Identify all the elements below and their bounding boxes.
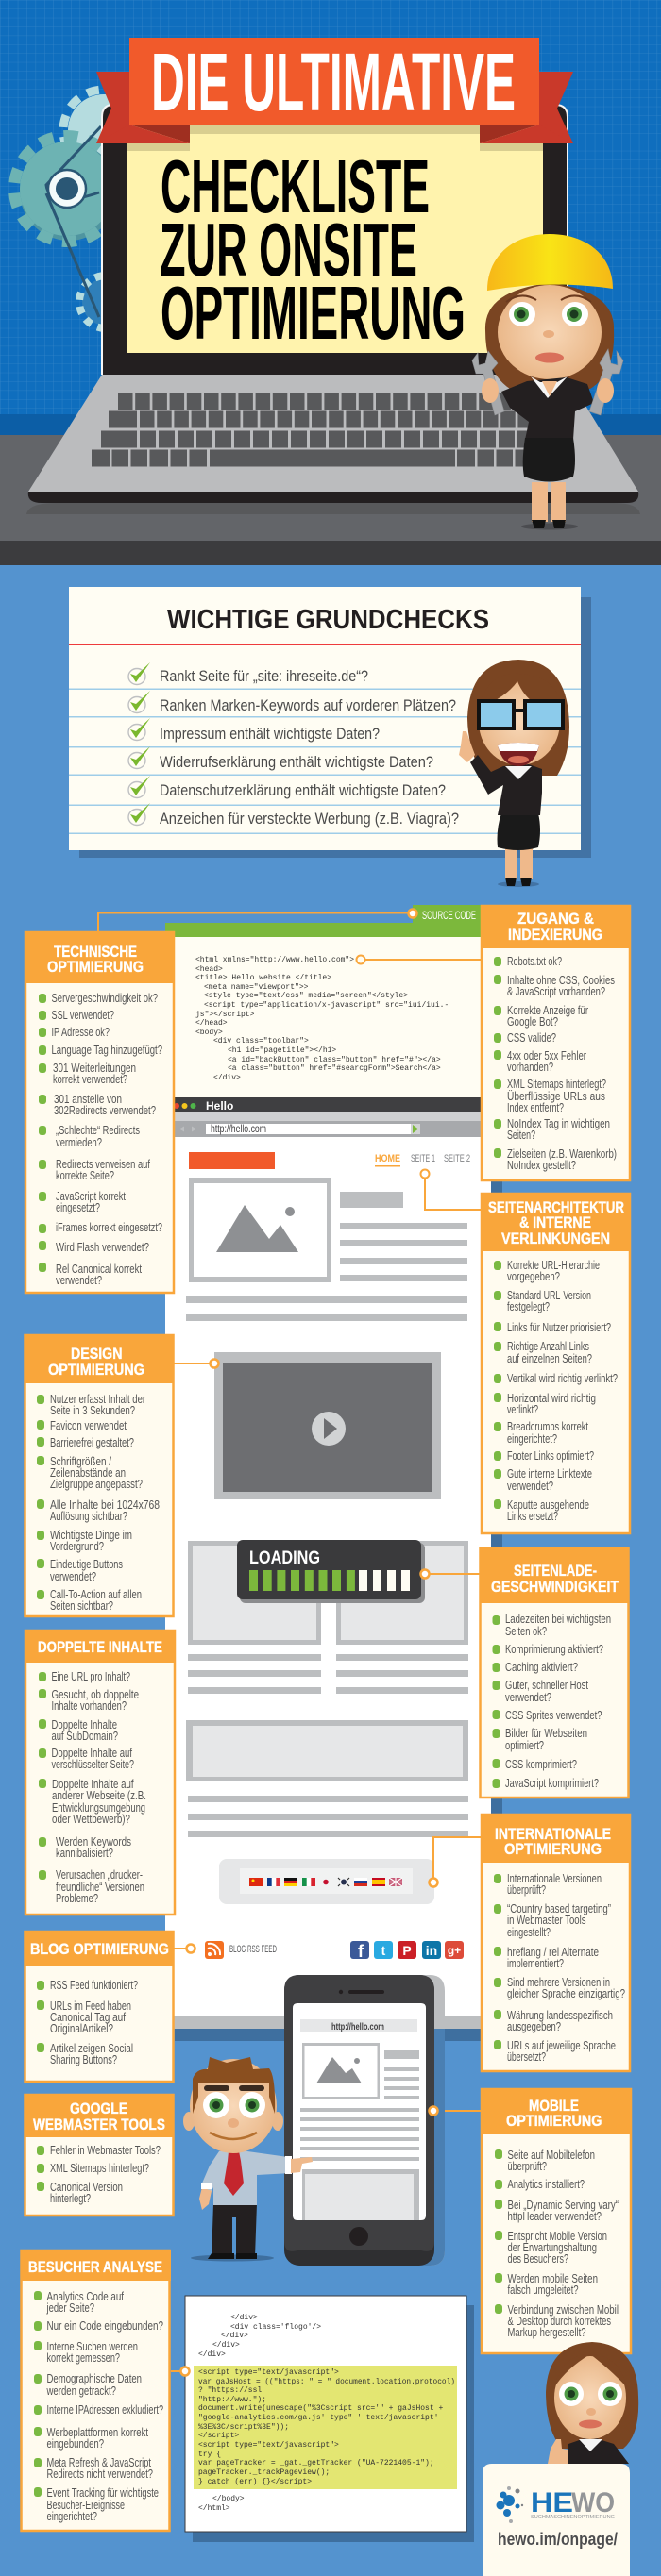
checklist: Meta Refresh & JavaScript bbox=[47, 2456, 151, 2469]
checklist: Artikel zeigen Social bbox=[50, 2042, 133, 2055]
tag: source code: SOURCE CODE bbox=[422, 909, 476, 922]
wide image placeholder bbox=[186, 1720, 468, 1837]
checklist: Zielseiten (z.B. Warenkorb) bbox=[507, 1147, 617, 1161]
checklist: Verursachen „drucker- bbox=[56, 1868, 143, 1882]
checklist: Guter, schneller Host bbox=[505, 1679, 588, 1692]
heading: INDEXIERUNG bbox=[508, 926, 602, 944]
checklist: OriginalArtikel? bbox=[50, 2022, 113, 2035]
checklist: Doppelte Inhalte auf bbox=[51, 1747, 132, 1760]
checklist: eingerichtet? bbox=[47, 2510, 97, 2523]
checklist: verwendet? bbox=[50, 1570, 96, 1583]
content placeholders bbox=[186, 1192, 467, 1321]
source code block: <html xmlns="http://www.hello.com"> bbox=[195, 956, 354, 964]
checklist bbox=[39, 1670, 146, 1905]
checklist: Kaputte ausgehende bbox=[507, 1498, 589, 1512]
source code block: <body> bbox=[195, 1029, 223, 1037]
checklist: Rel Canonical korrekt bbox=[56, 1263, 142, 1276]
image placeholders with text lines bbox=[188, 1541, 468, 1694]
checklist: eingerichtet? bbox=[507, 1432, 557, 1446]
checklist bbox=[128, 662, 459, 828]
logo tagline: SUCHMASCHINENOPTIMIERUNG bbox=[531, 2515, 615, 2520]
checklist: vorhanden? bbox=[507, 1061, 553, 1074]
heading: DESIGN bbox=[71, 1345, 123, 1363]
highlighted tracking code bbox=[194, 2366, 457, 2489]
source code block: </head> bbox=[195, 1019, 228, 1028]
checklist: werden getrackt? bbox=[46, 2384, 116, 2398]
code sample panel: <script type="text/javascript"> bbox=[198, 2368, 339, 2377]
checklist: Gesucht, ob doppelte bbox=[51, 1688, 139, 1701]
checklist: auf SubDomain? bbox=[51, 1730, 118, 1743]
heading bbox=[495, 1825, 611, 1858]
checklist: korrekte Seite? bbox=[56, 1169, 114, 1182]
checklist: Anzeichen für versteckte Werbung (z.B. Viagra)? bbox=[160, 810, 459, 828]
code sample panel: <script type="text/javascript"> bbox=[198, 2441, 339, 2450]
heading: BLOG OPTIMIERUNG bbox=[30, 1940, 169, 1958]
checklist: Gute interne Linktexte bbox=[507, 1467, 592, 1480]
icons: social media: in bbox=[426, 1943, 437, 1958]
image placeholder bbox=[189, 1178, 330, 1282]
source code block: <div class="toolbar"> bbox=[213, 1037, 309, 1045]
checklist: hinterlegt? bbox=[50, 2192, 91, 2205]
checklist: httpHeader verwendet? bbox=[508, 2210, 602, 2223]
code sample panel: <div class='flogo'/> bbox=[230, 2323, 321, 2332]
checklist: Rankt Seite für „site: ihreseite.de“? bbox=[160, 667, 368, 685]
checklist: Call-To-Action auf allen bbox=[50, 1588, 142, 1601]
laptop bbox=[26, 104, 640, 514]
code sample panel: var pageTracker = _gat._getTracker ("UA-7221405-1"); bbox=[198, 2459, 434, 2467]
checklist: auf einzelnen Seiten? bbox=[507, 1352, 592, 1365]
checklist bbox=[37, 1979, 138, 2066]
heading: OPTIMIERUNG bbox=[47, 958, 144, 976]
checklist: verschlüsselter Seite? bbox=[51, 1758, 134, 1771]
icons: social media bbox=[350, 1941, 464, 1961]
checklist: jeder Seite? bbox=[46, 2301, 94, 2315]
source code block: <a class="button" href="#searcgForm">Search</a> bbox=[228, 1064, 441, 1073]
heading: BESUCHER ANALYSE bbox=[28, 2258, 162, 2276]
panel: seitenladegeschwindigkeit bbox=[480, 1547, 629, 1798]
panel: hewo logo and link bbox=[483, 2464, 630, 2576]
site logo block bbox=[189, 1152, 275, 1169]
checklist: verwendet? bbox=[505, 1691, 551, 1704]
heading: SEITENARCHITEKTUR bbox=[488, 1198, 624, 1216]
heading bbox=[47, 943, 144, 976]
tag: source code bbox=[413, 905, 481, 923]
checklist: Event Tracking für wichtigste bbox=[47, 2486, 159, 2500]
code sample panel: var gaJsHost = (("https: " = " document.location.protocol) bbox=[198, 2378, 455, 2386]
checklist: korrekt gemessen? bbox=[47, 2351, 120, 2365]
checklist: Ranken Marken-Keywords auf vorderen Plätzen? bbox=[160, 696, 456, 714]
heading: wichtige grundchecks: WICHTIGE GRUNDCHECKS bbox=[167, 605, 489, 635]
icons: social media: g+ bbox=[448, 1944, 461, 1957]
checklist: JavaScript komprimiert? bbox=[505, 1777, 599, 1790]
checklist: Korrekte Anzeige für bbox=[507, 1004, 588, 1017]
video player bbox=[214, 1352, 441, 1499]
checklist: Eine URL pro Inhalt? bbox=[51, 1670, 130, 1683]
checklist: Google Bot? bbox=[507, 1015, 558, 1029]
checklist: Bilder für Webseiten bbox=[505, 1727, 587, 1740]
checklist: Barrierefrei gestaltet? bbox=[50, 1436, 134, 1449]
panel: wichtige grundchecks bbox=[69, 587, 591, 887]
heading bbox=[491, 1562, 619, 1596]
checklist: Schriftgrößen / bbox=[50, 1455, 111, 1468]
checklist: korrekt verwendet? bbox=[53, 1073, 127, 1086]
source code block: <title> Hello website </title> bbox=[195, 974, 331, 982]
checklist: festgelegt? bbox=[507, 1300, 550, 1313]
checklist: Entspricht Mobile Version bbox=[508, 2230, 607, 2243]
heading bbox=[508, 910, 602, 944]
code sample panel: document.write(unescape("%3Cscript src='" + gaJsHost + bbox=[198, 2404, 443, 2413]
browser chrome: http://hello.com bbox=[211, 1122, 266, 1135]
checklist: Canonical Tag auf bbox=[50, 2011, 126, 2024]
navigation: HOME bbox=[375, 1153, 400, 1164]
checklist: Index entfernt? bbox=[507, 1101, 564, 1114]
connectors bbox=[98, 910, 481, 2371]
heading: MOBILE bbox=[529, 2097, 579, 2115]
checklist: Horizontal wird richtig bbox=[507, 1392, 596, 1405]
browser chrome: Hello bbox=[206, 1099, 233, 1112]
source code block: <script type="application/x-javascript" src="iui/iui.- bbox=[204, 1001, 449, 1010]
checklist: Komprimierung aktiviert? bbox=[505, 1643, 603, 1656]
code sample panel: </div> bbox=[230, 2314, 258, 2322]
checklist: Korrekte URL-Hierarchie bbox=[507, 1259, 600, 1272]
link: hewo.im/onpage: hewo.im/onpage/ bbox=[498, 2530, 618, 2549]
checklist: Favicon verwendet bbox=[50, 1419, 127, 1432]
checklist: Zeilenabstände an bbox=[50, 1466, 126, 1480]
checklist: NoIndex Tag in wichtigen bbox=[507, 1117, 610, 1130]
code sample panel bbox=[185, 2296, 474, 2542]
heading: INTERNATIONALE bbox=[495, 1825, 611, 1843]
icon: molecule logo bbox=[497, 2486, 523, 2523]
checklist bbox=[34, 2290, 163, 2523]
panel: technische optimierung bbox=[25, 931, 175, 1293]
checklist: XML Sitemaps hinterlegt? bbox=[50, 2162, 149, 2175]
checklist: ausgegeben? bbox=[507, 2020, 561, 2033]
checklist: Widerrufserklärung enthält wichtigste Daten? bbox=[160, 753, 433, 771]
checklist: eingesetzt? bbox=[56, 1201, 100, 1214]
code sample panel: </body> bbox=[212, 2495, 245, 2503]
checklist: des Besuchers? bbox=[508, 2252, 568, 2266]
checklist: falsch umgeleitet? bbox=[508, 2283, 579, 2297]
navigation: SEITE 1 bbox=[411, 1153, 435, 1164]
heading bbox=[33, 2099, 165, 2133]
source code block bbox=[165, 905, 491, 1097]
checklist bbox=[494, 1872, 625, 2064]
checklist: Redirects verweisen auf bbox=[56, 1158, 150, 1171]
checklist: verwendet? bbox=[507, 1480, 553, 1493]
checklist: Interne Suchen werden bbox=[47, 2340, 138, 2353]
checklist: anderer Webseite (z.B. bbox=[52, 1789, 146, 1802]
heading bbox=[506, 2097, 602, 2130]
title line: checkliste: CHECKLISTE bbox=[161, 144, 430, 228]
checklist: Canonical Version bbox=[50, 2181, 123, 2194]
checklist: JavaScript korrekt bbox=[56, 1190, 126, 1203]
code sample panel: try { bbox=[198, 2451, 221, 2459]
checklist: iFrames korrekt eingesetzt? bbox=[56, 1221, 162, 1234]
checklist: CSS Sprites verwendet? bbox=[505, 1709, 602, 1722]
checklist: Wichtigste Dinge im bbox=[50, 1529, 132, 1542]
checklist: überprüft? bbox=[507, 1883, 546, 1897]
checklist: vermieden? bbox=[56, 1136, 102, 1149]
source code block: </div> bbox=[213, 1074, 241, 1082]
checklist: Links für Nutzer priorisiert? bbox=[507, 1321, 611, 1334]
checklist bbox=[37, 2144, 161, 2205]
checklist: Robots.txt ok? bbox=[507, 955, 562, 968]
checklist: Ladezeiten bei wichtigsten bbox=[505, 1613, 611, 1626]
connector endpoint on tracking code bbox=[181, 2367, 189, 2376]
panel: blog optimierung bbox=[25, 1931, 174, 2082]
character: woman giving thumbs up bbox=[546, 2342, 638, 2464]
navigation: SEITE 2 bbox=[444, 1153, 470, 1164]
checklist: Analytics installiert? bbox=[508, 2178, 585, 2191]
checklist: NoIndex gestellt? bbox=[507, 1159, 576, 1172]
checklist: Language Tag hinzugefügt? bbox=[51, 1044, 162, 1057]
checklist bbox=[39, 992, 162, 1287]
checklist: & JavaScript vorhanden? bbox=[507, 985, 605, 998]
checklist: URLs im Feed haben bbox=[50, 1999, 131, 2013]
checklist: Links ersetzt? bbox=[507, 1510, 558, 1523]
checklist: Demographische Daten bbox=[47, 2372, 142, 2385]
header scene bbox=[0, 0, 661, 565]
heading: TECHNISCHE bbox=[54, 943, 137, 961]
checklist: Doppelte Inhalte bbox=[51, 1718, 117, 1731]
checklist: gleicher Sprache einzigartig? bbox=[507, 1987, 625, 2000]
checklist: Inhalte vorhanden? bbox=[51, 1699, 127, 1713]
checklist: Nutzer erfasst Inhalt der bbox=[50, 1393, 145, 1406]
checklist: Vertikal wird richtig verlinkt? bbox=[507, 1372, 618, 1385]
checklist bbox=[494, 1259, 618, 1523]
checklist: XML Sitemaps hinterlegt? bbox=[507, 1078, 606, 1091]
phone: http://hello.com bbox=[331, 2021, 384, 2032]
checklist: übersetzt? bbox=[507, 2050, 546, 2064]
heading bbox=[48, 1345, 144, 1379]
code sample panel: pageTracker._trackPageview(); bbox=[198, 2468, 330, 2477]
logo wordmark: hewo bbox=[531, 2487, 615, 2518]
checklist: Richtige Anzahl Links bbox=[507, 1340, 589, 1353]
icon: wrenches bbox=[472, 349, 623, 415]
character: man pointing bbox=[183, 2057, 313, 2261]
code sample panel: ? "https://ssl bbox=[198, 2386, 262, 2395]
checklist: Währung landesspezifisch bbox=[507, 2009, 613, 2022]
checklist: 301 anstelle von bbox=[54, 1093, 122, 1106]
checklist: oder Wettbewerb)? bbox=[52, 1813, 130, 1826]
code sample panel: %3E%3C/script%3E")); bbox=[198, 2423, 289, 2432]
checklist: Datenschutzerklärung enthält wichtigste Daten? bbox=[160, 781, 446, 799]
code sample panel: </div> bbox=[198, 2350, 226, 2359]
loading bar: LOADING bbox=[249, 1548, 320, 1568]
checklist: Internationale Versionen bbox=[507, 1872, 602, 1885]
checklist: 302Redirects verwendet? bbox=[54, 1104, 156, 1117]
checklist bbox=[493, 1613, 611, 1790]
character: woman with glasses bbox=[459, 660, 569, 887]
checklist: RSS Feed funktioniert? bbox=[50, 1979, 138, 1992]
heading: VERLINKUNGEN bbox=[501, 1229, 610, 1247]
language flags bbox=[219, 1859, 434, 1904]
checklist: Markup hergestellt? bbox=[508, 2326, 586, 2339]
code sample panel: </html> bbox=[198, 2504, 230, 2513]
heading: OPTIMIERUNG bbox=[504, 1840, 602, 1858]
heading: GESCHWINDIGKEIT bbox=[491, 1578, 619, 1596]
logo wordmark: hewo: HE bbox=[531, 2487, 573, 2518]
checklist: Fehler in Webmaster Tools? bbox=[50, 2144, 161, 2157]
checklist: Vordergrund? bbox=[50, 1540, 104, 1553]
checklist: verwendet? bbox=[56, 1274, 102, 1287]
checklist: kannibalisiert? bbox=[56, 1847, 113, 1860]
checklist: Standard URL-Version bbox=[507, 1289, 591, 1302]
code sample panel: </div> bbox=[221, 2332, 248, 2340]
source code block: js"></script> bbox=[195, 1011, 255, 1019]
checklist: Besucher-Ereignisse bbox=[47, 2499, 125, 2512]
checklist: Sharing Buttons? bbox=[50, 2053, 117, 2066]
source code block: <a id="backButton" class="button" href="#"></a> bbox=[228, 1056, 441, 1064]
browser chrome bbox=[165, 1097, 491, 1137]
checklist: Redirects nicht verwendet? bbox=[47, 2467, 153, 2481]
panel: website mockup bbox=[165, 905, 502, 2041]
checklist: Wird Flash verwendet? bbox=[56, 1241, 149, 1254]
blue grid backdrop bbox=[0, 0, 661, 435]
keyboard bbox=[92, 402, 538, 459]
checklist: Auflösung sichtbar? bbox=[50, 1510, 127, 1523]
checklist: & Desktop durch korrektes bbox=[508, 2315, 611, 2328]
checklist: Seite in 3 Sekunden? bbox=[50, 1404, 135, 1417]
checklist: „Schlechte“ Redirects bbox=[56, 1124, 140, 1137]
heading: GOOGLE bbox=[70, 2099, 127, 2117]
checklist: Überflüssige URLs aus bbox=[507, 1090, 605, 1103]
source code block: <meta name="viewport">> bbox=[204, 983, 309, 992]
desk bbox=[0, 435, 661, 565]
checklist: eingebunden? bbox=[47, 2437, 104, 2451]
checklist: freundliche“ Versionen bbox=[56, 1881, 144, 1894]
icon: gears and belt bbox=[14, 90, 144, 328]
panel: besucher analyse bbox=[21, 2250, 171, 2531]
checklist: optimiert? bbox=[505, 1739, 544, 1752]
checklist bbox=[37, 1393, 160, 1613]
navigation bbox=[375, 1153, 470, 1166]
panel: design optimierung bbox=[25, 1334, 174, 1616]
code sample panel: </script> bbox=[198, 2432, 239, 2440]
heading: SEITENLADE- bbox=[514, 1562, 597, 1580]
source code block: <style type="text/css" media="screen"</style> bbox=[204, 992, 408, 1000]
checklist: CSS komprimiert? bbox=[505, 1758, 577, 1771]
checklist: Seiten ok? bbox=[505, 1625, 547, 1638]
checklist bbox=[495, 2149, 619, 2339]
checklist: vorgegeben? bbox=[507, 1270, 560, 1283]
checklist: Alle Inhalte bei 1024x768 bbox=[50, 1498, 160, 1512]
checklist: Zielgruppe angepasst? bbox=[50, 1478, 143, 1491]
heading: & INTERNE bbox=[519, 1213, 591, 1231]
checklist: Seiten? bbox=[507, 1129, 535, 1142]
checklist: Footer Links optimiert? bbox=[507, 1449, 594, 1463]
checklist: Caching aktiviert? bbox=[505, 1661, 578, 1674]
checklist: CSS valide? bbox=[507, 1031, 556, 1045]
loading bar bbox=[237, 1540, 425, 1603]
panel: seitenarchitektur und interne verlinkungen bbox=[481, 1193, 631, 1533]
title line: zur onsite: ZUR ONSITE bbox=[160, 208, 417, 292]
title bbox=[151, 37, 516, 355]
checklist: Sind mehrere Versionen in bbox=[507, 1976, 610, 1989]
checklist: Entwicklungsumgebung bbox=[52, 1801, 145, 1815]
heading: ZUGANG & bbox=[517, 910, 594, 928]
checklist: Doppelte Inhalte auf bbox=[52, 1778, 134, 1791]
phone bbox=[284, 1975, 445, 2266]
checklist: überprüft? bbox=[508, 2160, 547, 2173]
checklist: Breadcrumbs korrekt bbox=[507, 1420, 588, 1433]
checklist: Werden Keywords bbox=[56, 1835, 131, 1848]
ribbon bbox=[96, 38, 573, 143]
code sample panel: } catch (err) {}</script> bbox=[198, 2478, 312, 2486]
checklist: Interne IPAdressen exkludiert? bbox=[47, 2403, 163, 2417]
checklist: Werden mobile Seiten bbox=[508, 2272, 598, 2285]
code sample panel: "google-analytics.com/ga.js' type" ' text/javascript' bbox=[198, 2414, 438, 2422]
code sample panel: "http://www."); bbox=[198, 2396, 266, 2404]
checklist: Seiten sichtbar? bbox=[50, 1599, 113, 1613]
panel: doppelte inhalte bbox=[25, 1630, 176, 1915]
checklist: eingestellt? bbox=[507, 1926, 551, 1939]
checklist: Servergeschwindigkeit ok? bbox=[51, 992, 158, 1005]
checklist: Bei „Dynamic Serving vary“ bbox=[508, 2199, 619, 2212]
checklist: Nur ein Code eingebunden? bbox=[47, 2319, 163, 2333]
code sample panel: </div> bbox=[212, 2341, 240, 2350]
panel: mobile optimierung bbox=[481, 2088, 632, 2353]
source code block: <h1 id="pagetitle"></h1> bbox=[228, 1046, 336, 1055]
checklist: Eindeutige Buttons bbox=[50, 1558, 123, 1571]
icons: social media: P bbox=[402, 1943, 412, 1958]
checklist: Seite auf Mobiltelefon bbox=[508, 2149, 595, 2162]
checklist: URLs auf jeweilige Sprache bbox=[507, 2039, 616, 2052]
icons: social media: f bbox=[358, 1942, 364, 1961]
checklist: Werbeplattformen korrekt bbox=[47, 2426, 148, 2439]
panel: internationale optimierung bbox=[481, 1814, 631, 2071]
checklist: Inhalte ohne CSS, Cookies bbox=[507, 974, 615, 987]
logo wordmark: hewo: WO bbox=[571, 2487, 615, 2518]
icons: social media: t bbox=[381, 1943, 386, 1958]
checklist: 4xx oder 5xx Fehler bbox=[507, 1049, 586, 1062]
checklist: hreflang / rel Alternate bbox=[507, 1946, 599, 1959]
heading: OPTIMIERUNG bbox=[506, 2112, 602, 2130]
source code block: <head> bbox=[195, 965, 223, 974]
panel: google webmaster tools bbox=[25, 2094, 174, 2216]
checklist: “Country based targeting” bbox=[507, 1902, 611, 1915]
heading: DOPPELTE INHALTE bbox=[38, 1638, 162, 1656]
checklist: verlinkt? bbox=[507, 1403, 538, 1416]
checklist: 301 Weiterleitungen bbox=[53, 1062, 136, 1075]
checklist: Analytics Code auf bbox=[47, 2290, 124, 2303]
checklist: IP Adresse ok? bbox=[51, 1026, 110, 1039]
checklist: in Webmaster Tools bbox=[507, 1914, 585, 1927]
checklist: Verbindung zwischen Mobil bbox=[508, 2303, 619, 2317]
checklist: der Erwartungshaltung bbox=[508, 2241, 597, 2254]
heading bbox=[488, 1198, 624, 1247]
icon: rss feed bbox=[205, 1941, 224, 1959]
checklist: implementiert? bbox=[507, 1957, 564, 1970]
label: blog rss feed: BLOG RSS FEED bbox=[229, 1944, 277, 1955]
checklist: Impressum enthält wichtigste Daten? bbox=[160, 725, 380, 743]
character: engineer woman bbox=[472, 234, 623, 530]
heading: OPTIMIERUNG bbox=[48, 1361, 144, 1379]
checklist: Probleme? bbox=[56, 1892, 98, 1905]
heading: WEBMASTER TOOLS bbox=[33, 2116, 165, 2133]
checklist bbox=[494, 955, 617, 1172]
panel: zugang und indexierung bbox=[481, 905, 631, 1180]
checklist: SSL verwendet? bbox=[51, 1009, 114, 1022]
